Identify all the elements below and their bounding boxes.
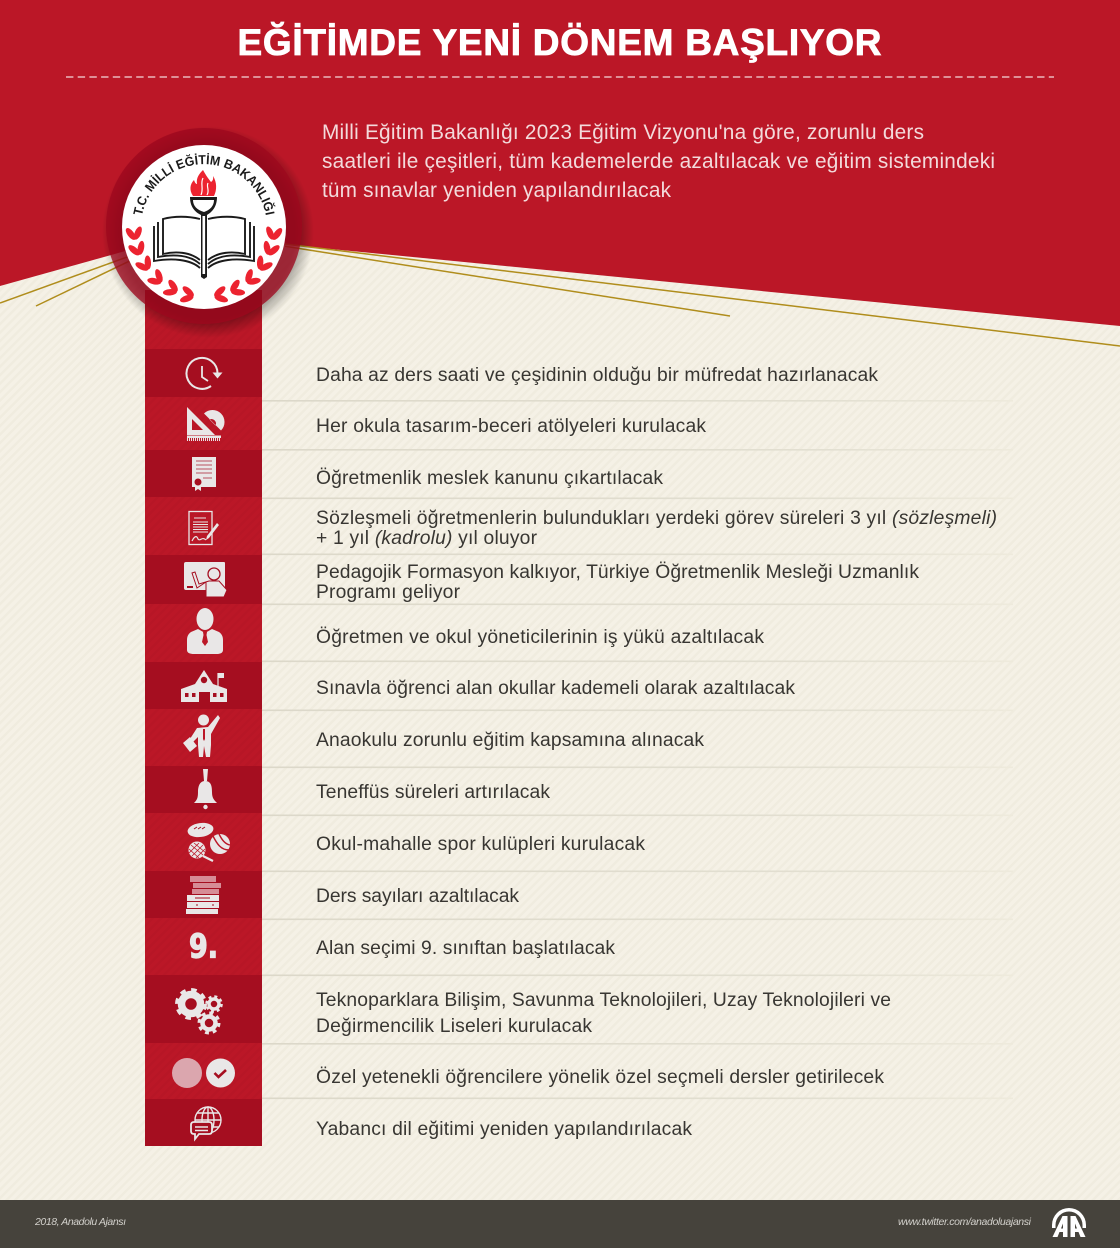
icon: option circles with check — [172, 1058, 235, 1088]
item 14: Özel yetenekli öğrencilere yönelik özel seçmeli dersler getirilecek — [316, 1066, 884, 1088]
icon: certificate — [192, 457, 216, 491]
item 5: Programı geliyor — [316, 582, 461, 603]
icon: signed contract — [189, 512, 219, 544]
intro text: saatleri ile çeşitleri, tüm kademelerde azaltılacak ve eğitim sistemindeki — [322, 150, 995, 173]
badge white disc — [122, 145, 286, 309]
item 13: Teknoparklara Bilişim, Savunma Teknolojileri, Uzay Teknolojileri ve — [316, 990, 891, 1011]
logo open book — [154, 217, 254, 268]
icon: stacked books — [186, 876, 221, 914]
red icon column — [145, 290, 262, 1146]
logo laurel right — [211, 225, 284, 306]
gold accent lines over the header edge — [285, 244, 1120, 346]
icon: gears — [177, 990, 222, 1033]
logo flame — [190, 170, 216, 196]
item 13 — [316, 990, 891, 1037]
item 8: Anaokulu zorunlu eğitim kapsamına alınacak — [316, 730, 704, 751]
icon: globe with speech bubble — [191, 1107, 221, 1139]
item 13: Değirmencilik Liseleri kurulacak — [316, 1016, 592, 1037]
icon: set square and protractor — [187, 407, 225, 440]
item 5: Pedagojik Formasyon kalkıyor, Türkiye Öğretmenlik Mesleği Uzmanlık — [316, 561, 919, 583]
item 7: Sınavla öğrenci alan okullar kademeli olarak azaltılacak — [316, 678, 795, 699]
item 2: Her okula tasarım-beceri atölyeleri kurulacak — [316, 416, 706, 437]
dashed divider — [66, 76, 1054, 78]
icon: sports balls — [187, 821, 230, 861]
logo torch — [190, 197, 217, 279]
footer url: www.twitter.com/anadoluajansi — [898, 1216, 1032, 1228]
icon: businessman — [187, 608, 223, 654]
intro text — [322, 121, 995, 202]
intro text: Milli Eğitim Bakanlığı 2023 Eğitim Vizyonu'na göre, zorunlu ders — [322, 121, 924, 144]
logo curved text: T.C. MİLLİ EĞİTİM BAKANLIĞI — [133, 153, 276, 215]
item 10: Okul-mahalle spor kulüpleri kurulacak — [316, 834, 645, 855]
footer credit: 2018, Anadolu Ajansı — [34, 1216, 126, 1228]
item 6: Öğretmen ve okul yöneticilerinin iş yükü azaltılacak — [316, 626, 764, 648]
item 4: + 1 yıl (kadrolu) yıl oluyor — [316, 528, 538, 549]
row dividers — [262, 400, 1013, 1099]
item 11: Ders sayıları azaltılacak — [316, 886, 519, 907]
icon: school — [181, 670, 227, 702]
icon: agency logo — [1052, 1208, 1086, 1237]
icon: number nine: 9. — [189, 926, 218, 966]
badge ring — [106, 128, 302, 324]
item 5 — [316, 561, 919, 603]
icon: teacher at board — [184, 562, 227, 597]
icon: clock — [187, 358, 222, 389]
item 4 — [316, 508, 997, 549]
red header panel — [0, 0, 1120, 326]
item 15: Yabancı dil eğitimi yeniden yapılandırılacak — [316, 1119, 692, 1140]
badge shadow — [102, 126, 314, 338]
item 4: Sözleşmeli öğretmenlerin bulundukları yerdeki görev süreleri 3 yıl (sözleşmeli) — [316, 508, 997, 529]
title: EĞİTİMDE YENİ DÖNEM BAŞLIYOR — [238, 22, 882, 63]
item 3: Öğretmenlik meslek kanunu çıkartılacak — [316, 467, 663, 489]
gold accent lines — [0, 256, 140, 306]
item 9: Teneffüs süreleri artırılacak — [316, 782, 550, 803]
logo laurel left — [124, 225, 197, 306]
icon: student with raised hand — [183, 714, 220, 757]
intro text: tüm sınavlar yeniden yapılandırılacak — [322, 179, 672, 202]
list items — [316, 365, 997, 1140]
item 1: Daha az ders saati ve çeşidinin olduğu bir müfredat hazırlanacak — [316, 365, 878, 386]
icon: bell — [194, 769, 217, 809]
logo badge — [104, 128, 312, 336]
footer bar — [0, 1200, 1120, 1248]
item 12: Alan seçimi 9. sınıftan başlatılacak — [316, 938, 615, 959]
